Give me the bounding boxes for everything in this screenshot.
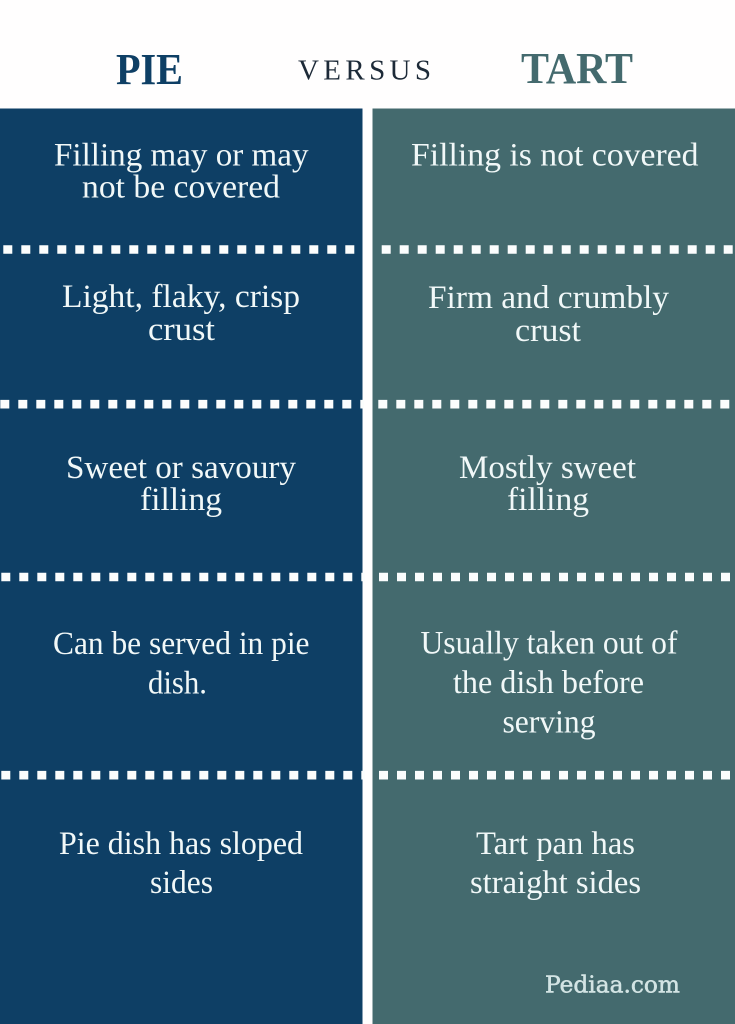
text: pie row 2	[62, 279, 300, 348]
text: tart row 3	[459, 450, 636, 518]
text: tart row 2: Firm and crumbly	[428, 280, 670, 316]
text: pie row 1: Filling may or may	[54, 138, 309, 174]
panel: pie column	[0, 108, 362, 1024]
text: pie row 4: dish.	[148, 666, 207, 702]
text: tart row 3: filling	[507, 482, 589, 518]
text: pie row 2: crust	[148, 312, 215, 348]
text: pie row 3: filling	[140, 482, 222, 518]
text: tart row 5: straight sides	[470, 865, 641, 901]
text: tart row 5: Tart pan has	[476, 826, 635, 862]
text: tart row 3: Mostly sweet	[459, 450, 636, 486]
text: pie row 3	[66, 450, 297, 518]
text: pie row 1	[54, 138, 309, 206]
text: tart row 4	[420, 626, 678, 740]
heading: VERSUS: VERSUS	[298, 54, 431, 86]
text: pie row 1: not be covered	[82, 170, 280, 206]
text: pie row 3: Sweet or savoury	[66, 450, 297, 486]
text: tart row 5	[470, 826, 641, 901]
text: tart row 2	[428, 280, 670, 349]
text: pie row 5	[59, 826, 303, 901]
text: pie row 4: Can be served in pie	[53, 626, 310, 662]
text: pie row 2: Light, flaky, crisp	[62, 279, 300, 315]
text: tart row 4: serving	[502, 704, 596, 740]
text: tart row 4: the dish before	[453, 665, 644, 701]
title: TART: TART	[521, 44, 633, 93]
logo: Pediaa.com: Pediaa.com	[545, 972, 680, 998]
title: PIE: PIE	[116, 45, 183, 94]
text: tart row 2: crust	[515, 313, 581, 349]
text: pie row 5: sides	[150, 865, 213, 901]
panel: tart column	[372, 108, 735, 1024]
text: tart row 4: Usually taken out of	[420, 626, 678, 662]
text: tart row 1: Filling is not covered	[411, 138, 698, 174]
text: pie row 4	[53, 626, 310, 702]
text: pie row 5: Pie dish has sloped	[59, 826, 303, 862]
